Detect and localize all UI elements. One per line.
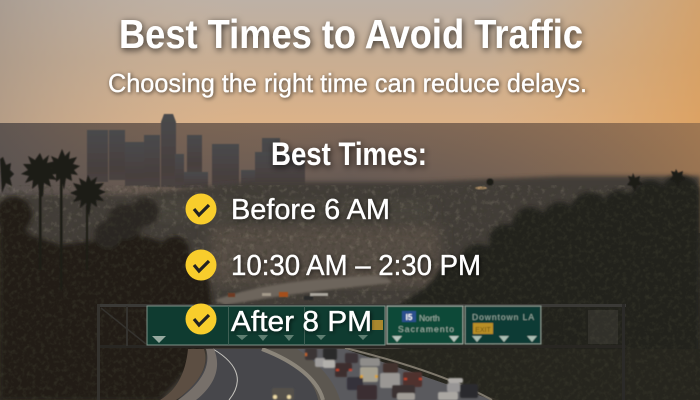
background: hazy horizon (0, 123, 700, 233)
subtitle: Choosing the right time can reduce delays. (108, 68, 587, 98)
green highway sign left (147, 306, 385, 345)
green highway sign: I-5 North Sacramento (387, 306, 463, 344)
heading: best times: Best Times: (271, 136, 427, 172)
title: Best Times to Avoid Traffic (119, 11, 583, 57)
background: sunset sky (0, 0, 700, 124)
list item: after 8 PM: After 8 PM (231, 306, 372, 338)
green highway sign: I-5 North Sacramento: I5 (406, 313, 413, 322)
list item: before 6 AM: Before 6 AM (231, 194, 390, 226)
background: distant city sprawl (0, 176, 700, 400)
green highway sign: I-5 North Sacramento: Sacramento (398, 324, 454, 334)
green highway sign: I-5 North Sacramento: North (419, 313, 440, 323)
background: freeway road (160, 275, 492, 400)
cars on freeway (272, 348, 478, 400)
background: dark tree canopy (0, 175, 700, 400)
icon: yellow check (186, 304, 216, 334)
list item: after 8 PM (186, 304, 372, 338)
overhead sign gantry (97, 304, 626, 400)
background: downtown skyline (87, 114, 305, 188)
cars on far freeway (228, 292, 328, 300)
list item: 10:30 AM to 2:30 PM: 10:30 AM – 2:30 PM (231, 250, 481, 282)
green highway sign: Downtown LA: EXIT (475, 327, 492, 334)
green highway sign: Downtown LA (465, 306, 541, 344)
background: palm trees (0, 149, 685, 290)
icon: yellow check (186, 194, 216, 224)
green highway sign: Downtown LA: Downtown LA (472, 312, 534, 322)
icon: yellow check (186, 250, 216, 280)
